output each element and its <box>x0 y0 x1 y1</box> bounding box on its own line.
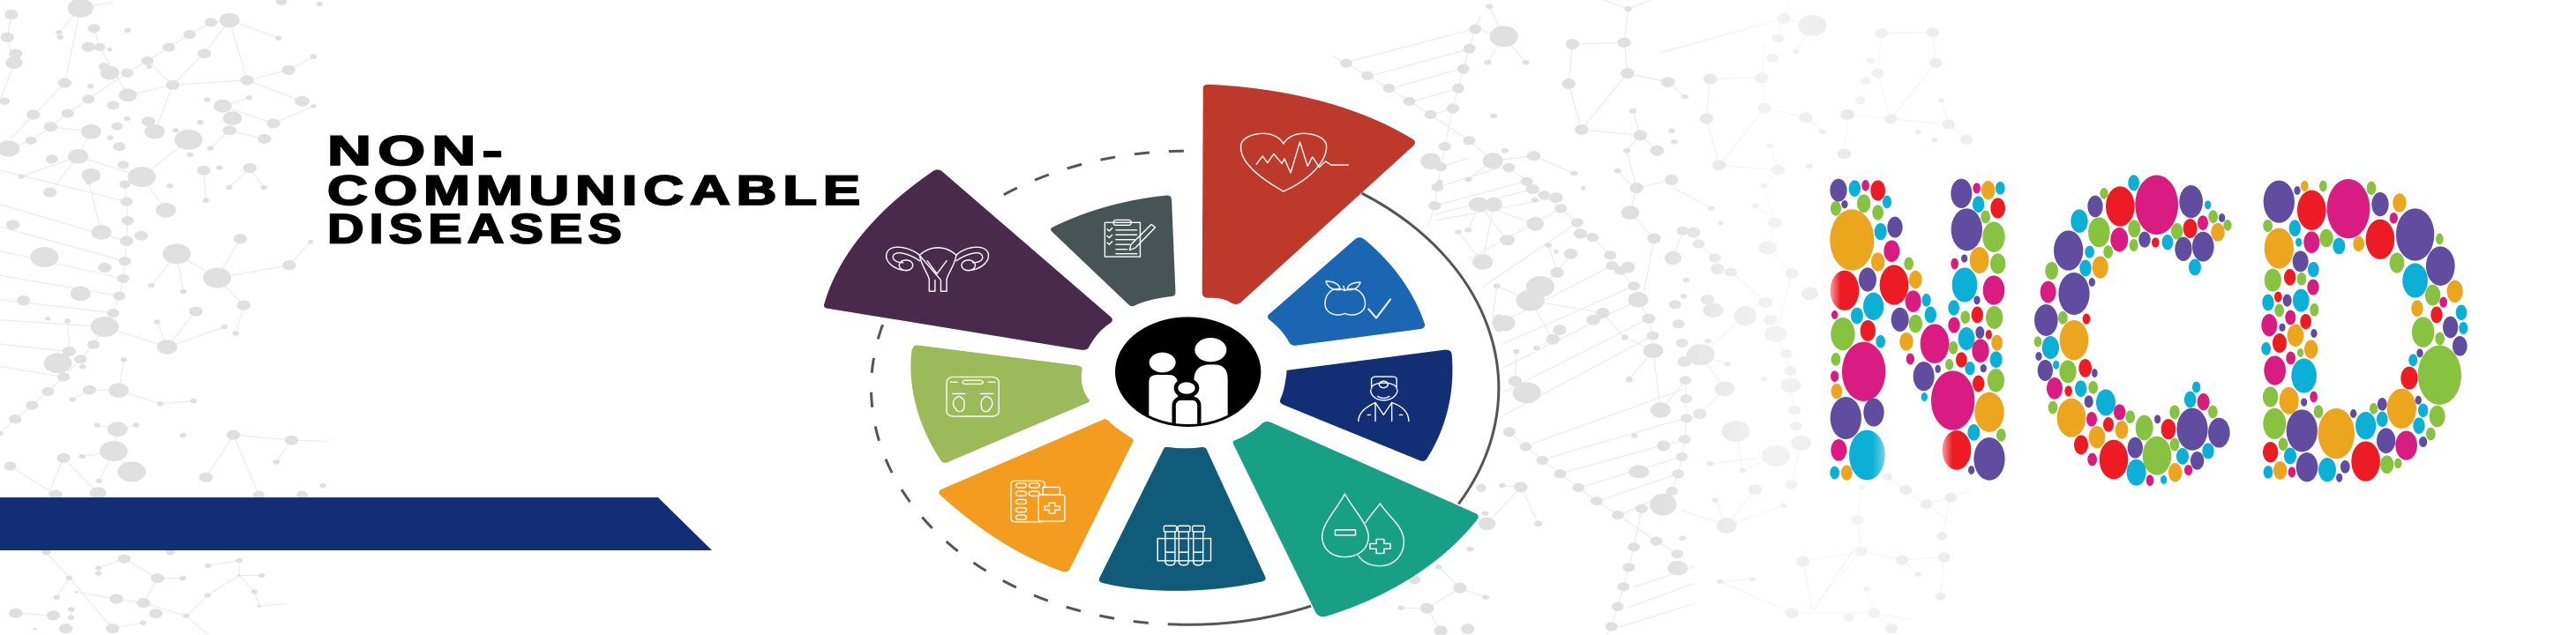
icon: apple with check mark <box>1325 281 1390 318</box>
background: molecular network right <box>1780 27 1973 633</box>
segment: healthy diet <box>1268 237 1425 346</box>
segment: screening checklist <box>1051 196 1175 306</box>
icon: test tubes in rack <box>1157 526 1211 565</box>
background: molecular network left <box>0 0 329 635</box>
white disc behind wheel <box>872 152 1501 624</box>
NCD letters: N and C <box>1830 175 2232 486</box>
segment: doctor consultation <box>1280 350 1452 461</box>
letter C <box>2034 175 2232 486</box>
icon: pill pack and bottle <box>1011 481 1065 522</box>
background: molecular network centre <box>1332 0 1854 635</box>
letter D <box>2261 179 2467 482</box>
banner bar <box>0 497 712 550</box>
icon: heart with ECG line <box>1240 133 1348 191</box>
segment: blood sugar <box>1233 422 1479 616</box>
title: COMMUNICABLE <box>327 167 866 213</box>
segment: laboratory tests <box>1099 447 1266 591</box>
segment: body weight <box>910 345 1090 463</box>
title: DISEASES <box>327 205 627 252</box>
icon: clipboard and pencil <box>1105 220 1155 257</box>
letter N <box>1830 179 2006 481</box>
icon: weighing scale with feet <box>947 377 999 416</box>
wheel diagram <box>824 85 1501 624</box>
outer ring: solid and dashed arcs <box>872 151 1499 624</box>
segment: heart health <box>1202 85 1415 304</box>
title <box>327 127 866 252</box>
icon: doctor <box>1359 377 1409 422</box>
icon: uterus <box>887 247 989 291</box>
segment: reproductive health <box>824 169 1112 350</box>
background fade overlay <box>1659 0 1888 635</box>
centre icon: family <box>1115 317 1261 430</box>
title: NON- <box>327 127 509 174</box>
icon: blood drops with minus and plus <box>1322 494 1404 566</box>
segment: medication <box>939 419 1134 572</box>
